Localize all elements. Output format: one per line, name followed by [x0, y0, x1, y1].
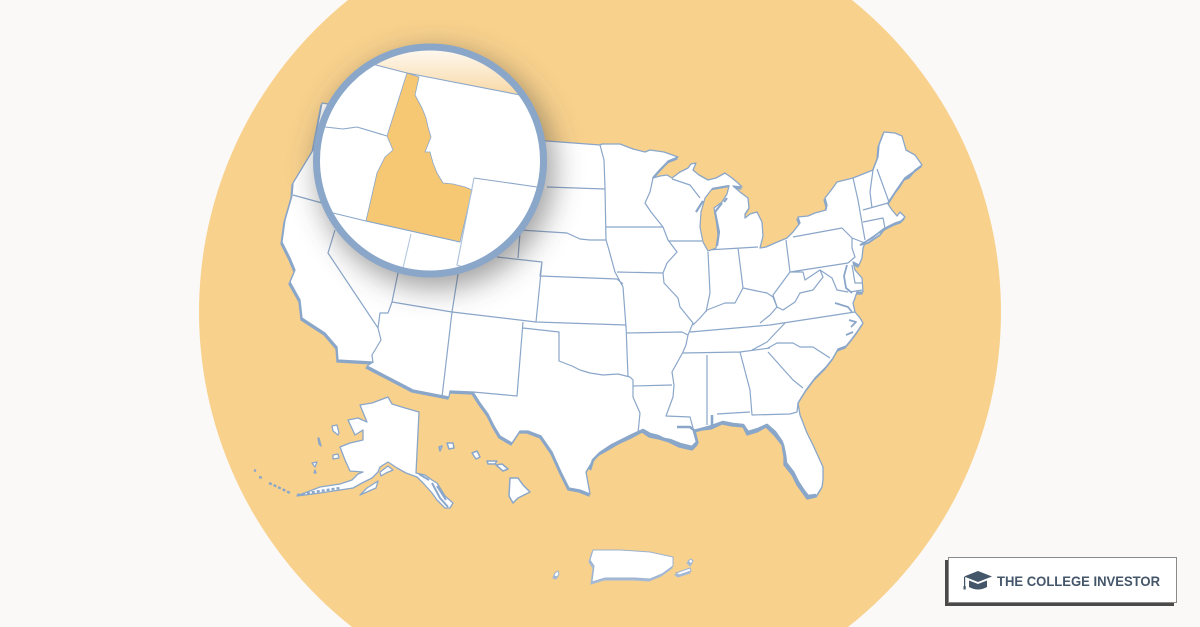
- mainland outline: [282, 103, 922, 497]
- Alaska panhandle islands: [419, 474, 448, 507]
- map: Puerto Rico: [554, 550, 693, 582]
- icon: graduation cap: [964, 571, 992, 590]
- background circle: [199, 0, 1001, 627]
- map: Hawaii: [439, 443, 530, 503]
- Aleutian Islands: [254, 470, 340, 495]
- coastal details: Chesapeake, Carolinas, New England: [835, 166, 921, 335]
- lens: area north of border: [376, 50, 518, 94]
- magnifier lens shadow: [318, 52, 554, 288]
- lens: Idaho highlighted: [366, 73, 472, 242]
- logo text: THE COLLEGE INVESTOR: [997, 573, 1160, 589]
- logo box: [948, 558, 1176, 602]
- lake shore accents: [653, 158, 729, 246]
- map: Alaska: [297, 397, 453, 508]
- logo shadow: [945, 560, 1174, 606]
- Lake Michigan: [700, 186, 729, 251]
- lens: state borders: [325, 64, 537, 268]
- logo: The College Investor: [945, 558, 1176, 606]
- Long Island: [860, 228, 885, 245]
- magnifier lens: [316, 40, 544, 274]
- lens ring: [316, 47, 544, 274]
- map: contiguous United States: [282, 103, 922, 497]
- coastal band: Gulf of Mexico: [590, 415, 816, 496]
- state borders: [293, 145, 889, 433]
